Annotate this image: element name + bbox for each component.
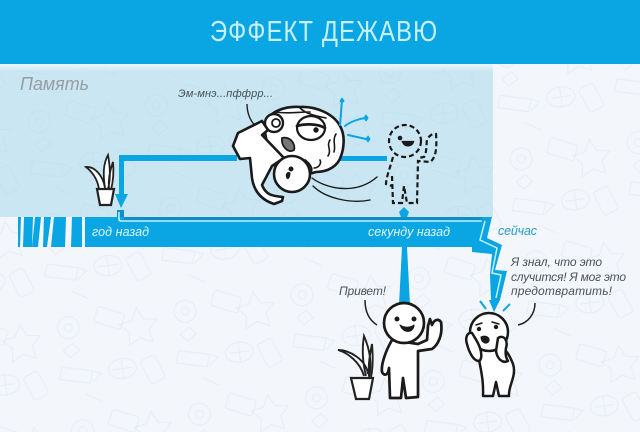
title: ЭФФЕКТ ДЕЖАВЮ bbox=[210, 15, 437, 48]
arrow: memory to year ago bbox=[115, 155, 237, 208]
label: year ago: год назад bbox=[92, 225, 149, 239]
alarm marks bbox=[480, 301, 510, 311]
brain bbox=[265, 107, 344, 173]
header banner bbox=[0, 0, 640, 64]
timeline bar bbox=[18, 210, 488, 247]
panel: memory bbox=[0, 64, 493, 217]
plant beside person bbox=[338, 336, 373, 399]
arrow: second ago up to dashed figure bbox=[399, 207, 409, 217]
figure: dashed memory of person bbox=[386, 125, 436, 203]
connector: brain to dashed figure bbox=[340, 156, 387, 161]
speech: I knew it: Я знал, что это bbox=[510, 255, 602, 269]
memory stub bbox=[117, 210, 124, 217]
lightning bolt bbox=[472, 217, 507, 312]
figure: shocked person now bbox=[466, 313, 514, 396]
heading: memory: Память bbox=[20, 74, 89, 94]
label: now: сейчас bbox=[498, 224, 538, 238]
label: second ago: секунду назад bbox=[368, 225, 450, 239]
speech: I knew it bbox=[510, 255, 626, 325]
speech: hello: Привет! bbox=[339, 284, 387, 298]
speech: brain bbox=[178, 88, 273, 128]
icon: plant in memory bbox=[86, 155, 114, 205]
motion lines bbox=[312, 177, 377, 201]
arrow: second ago down to person bbox=[399, 247, 410, 305]
impact marks bbox=[340, 101, 366, 139]
figure: person waving bbox=[382, 303, 441, 398]
speech: brain: Эм-мнэ...пффрр... bbox=[178, 88, 273, 100]
illustration: brain hitting figure bbox=[233, 98, 377, 204]
speech: I knew it: предотвратить! bbox=[511, 284, 613, 298]
whacked figure bbox=[233, 121, 312, 204]
speech: I knew it: случится! Я мог это bbox=[511, 270, 626, 284]
speech: hello bbox=[339, 284, 387, 325]
